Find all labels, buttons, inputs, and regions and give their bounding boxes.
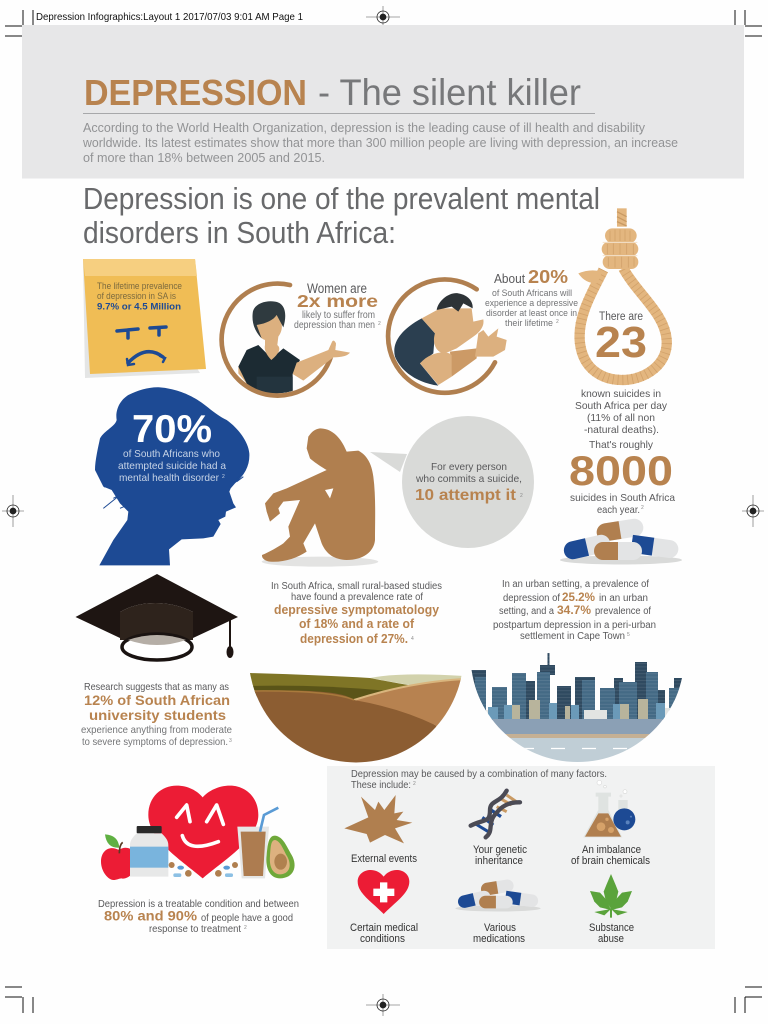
panel: 20 percent: of South Africans will bbox=[492, 288, 572, 299]
panel: 70 percent head silhouette: 2 bbox=[222, 474, 225, 480]
panel: rural study: In South Africa, small rural-based studies bbox=[271, 581, 442, 592]
panel: speech bubble bbox=[370, 416, 534, 548]
panel: university students: 12% of South African bbox=[84, 693, 230, 708]
label: external events: External events bbox=[351, 853, 417, 865]
intro paragraph: According to the World Health Organization, depression is the leading cause of ill health and disability bbox=[83, 120, 645, 135]
icon: city skyline bbox=[470, 650, 686, 764]
panel: 70 percent head silhouette: attempted suicide had a bbox=[118, 460, 226, 472]
icon: medication pills bbox=[455, 879, 541, 912]
panel: urban study: setting, and a bbox=[499, 606, 554, 617]
panel: university students bbox=[76, 574, 238, 748]
panel: treatment: 2 bbox=[244, 925, 247, 931]
panel: urban study: in an urban bbox=[599, 593, 648, 604]
panel: suicides per day: suicides in South Africa bbox=[570, 492, 675, 504]
panel: suicides per day: That's roughly bbox=[589, 439, 654, 451]
icon: sad face bbox=[117, 327, 166, 365]
panel: 70 percent head silhouette: of South Africans who bbox=[123, 448, 220, 460]
icon: external events burst bbox=[344, 795, 412, 843]
icon: noose bbox=[578, 208, 667, 380]
icon: graduation cap bbox=[76, 574, 238, 660]
panel: treatment: of people have a good bbox=[201, 912, 293, 924]
intro paragraph: of more than 18% between 2005 and 2015. bbox=[83, 150, 325, 165]
panel: causes: 2 bbox=[413, 781, 416, 787]
panel: women 2x more bbox=[222, 281, 381, 397]
label: various medications bbox=[473, 922, 525, 945]
panel: sticky note bbox=[83, 259, 206, 378]
panel: sticky note: 9.7% or 4.5 Million bbox=[97, 302, 181, 312]
icon: rural landscape bbox=[250, 673, 462, 762]
print slug line: Depression Infographics:Layout 1 2017/07/03 9:01 AM Page 1 bbox=[36, 11, 303, 23]
label: genetic inheritance: Your genetic bbox=[473, 844, 527, 856]
panel: treatment: response to treatment bbox=[149, 923, 241, 935]
panel: rural study: 4 bbox=[411, 636, 414, 642]
icon: pills bbox=[560, 517, 682, 564]
panel: 20 percent: disorder at least once in bbox=[486, 308, 577, 319]
title: DEPRESSION bbox=[84, 72, 307, 113]
icon: heart and healthy items bbox=[101, 786, 295, 880]
icon: cannabis leaf bbox=[590, 874, 632, 918]
panel: 20 percent: experience a depressive bbox=[485, 298, 578, 309]
panel: rural study: of 18% and a rate of bbox=[299, 617, 415, 631]
panel: urban study: depression of bbox=[503, 593, 560, 604]
panel: 20 percent: About bbox=[494, 271, 525, 286]
label: substance abuse bbox=[589, 922, 634, 945]
section heading: Depression is one of the prevalent mental bbox=[83, 181, 600, 216]
panel: urban study: postpartum depression in a peri-urban bbox=[493, 620, 656, 631]
panel: suicides per day: each year. bbox=[597, 504, 640, 516]
panel: 70 percent head silhouette: mental health disorder bbox=[119, 472, 219, 484]
panel: treatment: Depression is a treatable condition and between bbox=[98, 898, 299, 910]
panel: university students: Research suggests that as many as bbox=[84, 681, 229, 693]
icon: sitting man silhouette bbox=[262, 428, 378, 567]
label: brain chemicals: An imbalance bbox=[582, 844, 641, 856]
panel: university students: to severe symptoms of depression. bbox=[82, 736, 228, 748]
panel: suicides per day: 23 bbox=[595, 318, 647, 367]
panel: rural study: depression of 27%. bbox=[300, 632, 408, 646]
panel: urban study: In an urban setting, a prevalence of bbox=[502, 579, 649, 590]
panel: rural study: depressive symptomatology bbox=[274, 603, 439, 617]
section heading: disorders in South Africa: bbox=[83, 215, 396, 250]
panel: urban study: 25.2% bbox=[562, 592, 595, 604]
label: brain chemicals bbox=[571, 844, 650, 867]
panel: suicides per day: There are bbox=[599, 311, 643, 323]
panel: causes: These include: bbox=[351, 779, 411, 791]
panel: urban study: 5 bbox=[627, 632, 630, 638]
panel: suicides per day: South Africa per day bbox=[575, 400, 668, 412]
panel: 70 percent head silhouette bbox=[95, 387, 249, 565]
panel: treatment bbox=[98, 786, 299, 935]
panel: rural study bbox=[249, 581, 470, 770]
title: - The silent killer bbox=[318, 72, 581, 113]
icon: DNA bbox=[471, 791, 520, 837]
panel: speech bubble: 10 attempt it bbox=[415, 487, 517, 504]
panel: urban study: settlement in Cape Town bbox=[520, 631, 625, 642]
panel: women 2x more: depression than men bbox=[294, 320, 375, 331]
panel: sticky note: The lifetime prevalence bbox=[97, 281, 182, 291]
panel: women 2x more: likely to suffer from bbox=[302, 310, 375, 321]
title bbox=[84, 72, 581, 113]
label: substance abuse: Substance bbox=[589, 922, 634, 934]
panel: speech bubble: 2 bbox=[520, 493, 523, 499]
icon: blue head bbox=[95, 387, 249, 565]
panel: causes bbox=[327, 766, 715, 949]
panel: suicides per day: 2 bbox=[641, 505, 644, 511]
panel: speech bubble: For every person bbox=[431, 461, 507, 473]
panel: 20 percent: 20% bbox=[528, 266, 568, 287]
panel: 20 percent: 2 bbox=[556, 319, 559, 325]
label: substance abuse: abuse bbox=[598, 933, 624, 945]
panel: urban study: 34.7% bbox=[557, 605, 591, 617]
panel: suicides per day bbox=[560, 208, 682, 564]
panel: suicides per day: (11% of all non bbox=[587, 412, 655, 424]
panel: women 2x more: 2x more bbox=[297, 291, 378, 311]
intro paragraph: worldwide. Its latest estimates show that more than 300 million people are living with depression, an increase bbox=[82, 135, 678, 150]
section heading bbox=[83, 181, 600, 250]
label: medical conditions: Certain medical bbox=[350, 922, 418, 934]
icon: man with head on hands bbox=[388, 279, 507, 393]
label: brain chemicals: of brain chemicals bbox=[571, 855, 650, 867]
panel: 70 percent head silhouette: 70% bbox=[132, 408, 212, 451]
panel: suicides per day: 8000 bbox=[569, 447, 673, 494]
label: medical conditions bbox=[350, 922, 418, 945]
panel: 20 percent: their lifetime bbox=[505, 318, 553, 329]
icon: heart with cross bbox=[358, 870, 409, 914]
panel: speech bubble: who commits a suicide, bbox=[415, 473, 522, 485]
panel: suicides per day: -natural deaths). bbox=[584, 424, 659, 436]
panel: suicides per day: known suicides in bbox=[581, 388, 661, 400]
panel: university students: experience anything from moderate bbox=[81, 724, 232, 736]
intro paragraph bbox=[82, 120, 678, 165]
panel: women 2x more: Women are bbox=[307, 281, 367, 296]
label: medical conditions: conditions bbox=[360, 933, 405, 945]
label: genetic inheritance bbox=[473, 844, 527, 867]
panel: treatment: 80% and 90% bbox=[104, 908, 197, 924]
header panel bbox=[22, 25, 744, 178]
panel: causes: Depression may be caused by a combination of many factors. bbox=[351, 768, 607, 780]
label: various medications: medications bbox=[473, 933, 525, 945]
icon: woman in ring bbox=[222, 284, 350, 397]
icon: flasks bbox=[583, 780, 635, 837]
label: various medications: Various bbox=[484, 922, 516, 934]
panel: university students: 3 bbox=[229, 738, 232, 744]
panel: urban study bbox=[470, 579, 686, 764]
label: genetic inheritance: inheritance bbox=[475, 855, 523, 867]
panel: university students: university students bbox=[89, 708, 226, 723]
panel: urban study: prevalence of bbox=[595, 606, 651, 617]
panel: 20 percent bbox=[388, 266, 578, 393]
panel: sticky note: of depression in SA is bbox=[97, 291, 176, 301]
panel: women 2x more: 2 bbox=[378, 321, 381, 327]
panel: rural study: have found a prevalence rate of bbox=[291, 592, 423, 603]
